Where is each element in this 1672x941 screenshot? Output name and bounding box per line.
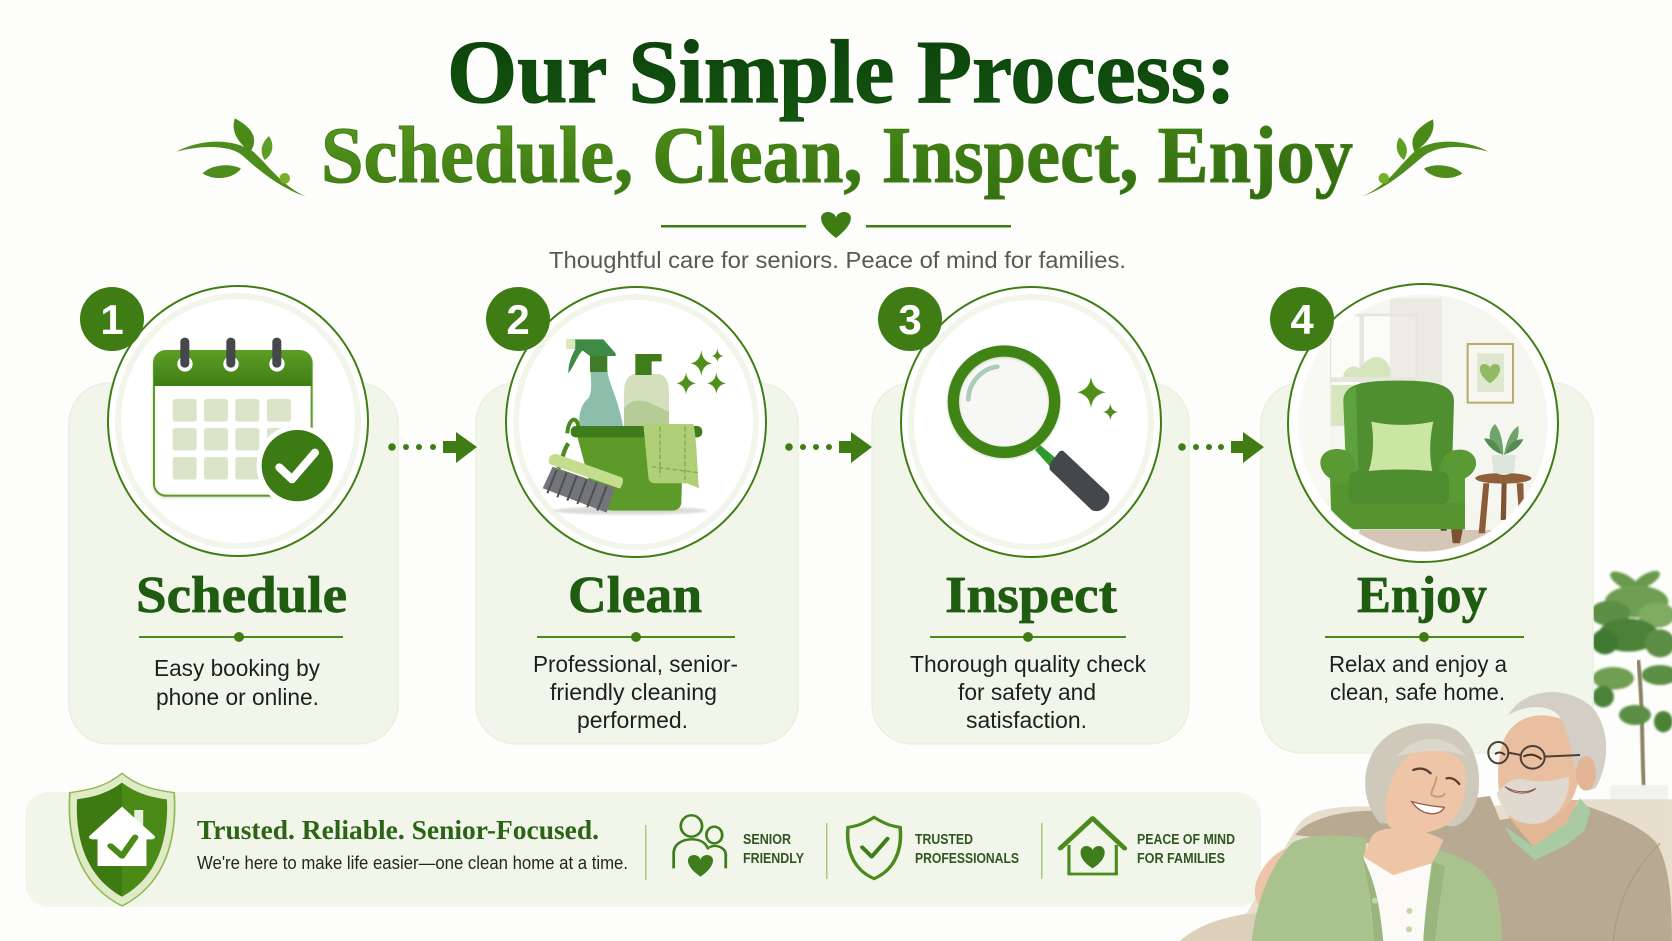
icon: left leaf ornament — [176, 118, 306, 197]
step 3 divider — [930, 632, 1126, 642]
band tagline: We're here to make life easier—one clean home at a time. — [197, 853, 628, 873]
feature: trusted professionals: PROFESSIONALS — [915, 851, 1019, 867]
step 3 number badge: 3 — [898, 296, 922, 343]
step 2 description: performed. — [577, 707, 688, 733]
step 1 description: Easy booking by — [154, 655, 320, 681]
card 1 panel — [69, 383, 398, 744]
arrow 1 to 2 — [388, 432, 477, 463]
senior couple on sofa — [1180, 692, 1672, 941]
step 3 description — [910, 651, 1146, 733]
step 2 number badge — [486, 287, 550, 351]
feature: senior friendly: FRIENDLY — [743, 851, 804, 867]
feature: trusted professionals: TRUSTED — [915, 832, 973, 848]
feature: peace of mind — [1137, 832, 1235, 867]
band headline: Trusted. Reliable. Senior-Focused. — [197, 815, 599, 845]
arrow 3 to 4 — [1178, 432, 1264, 463]
feature: senior friendly — [743, 832, 804, 867]
step 1 description — [154, 655, 320, 710]
feature icons — [674, 815, 1125, 879]
step 4 description: clean, safe home. — [1330, 679, 1505, 705]
step 4 number badge — [1270, 287, 1334, 351]
step 2 divider — [537, 632, 735, 642]
step 4 divider — [1325, 632, 1524, 642]
arrow 2 to 3 — [785, 432, 872, 463]
step 2 description: Professional, senior- — [533, 651, 738, 677]
feature: peace of mind: FOR FAMILIES — [1137, 851, 1225, 867]
step 3 description: satisfaction. — [966, 707, 1087, 733]
step 4 description — [1329, 651, 1507, 705]
step 4 circle and armchair room illustration — [1288, 284, 1558, 562]
icon: right leaf ornament — [1362, 119, 1489, 197]
step 2 number badge: 2 — [506, 296, 530, 343]
step 1 divider — [139, 632, 343, 642]
step 3 circle and magnifier icon — [901, 287, 1161, 557]
feature: trusted professionals — [915, 832, 1019, 867]
tagline: Thoughtful care for seniors. Peace of mind for families. — [549, 247, 1126, 273]
step 1 number badge — [80, 287, 144, 351]
step 4 heading: Enjoy — [1357, 567, 1487, 624]
feature: senior friendly: SENIOR — [743, 832, 791, 848]
step 3 heading: Inspect — [945, 567, 1118, 624]
step 1 heading: Schedule — [136, 567, 347, 624]
step 1 description: phone or online. — [156, 684, 319, 710]
title: Our Simple Process: — [447, 23, 1236, 122]
bottom trust band — [25, 792, 1261, 907]
feature: peace of mind: PEACE OF MIND — [1137, 832, 1235, 848]
step 1 number badge: 1 — [100, 296, 124, 343]
step 1 circle and calendar icon — [108, 286, 368, 556]
card 2 panel — [476, 383, 798, 744]
card 3 panel — [872, 383, 1189, 744]
step 4 description: Relax and enjoy a — [1329, 651, 1507, 677]
step 2 circle and cleaning supplies icon — [506, 287, 766, 557]
step 2 heading: Clean — [568, 567, 702, 624]
step 4 number badge: 4 — [1290, 296, 1314, 343]
step 2 description — [533, 651, 738, 733]
card 4 panel — [1261, 383, 1593, 753]
step 3 number badge — [878, 287, 942, 351]
step 3 description: for safety and — [958, 679, 1096, 705]
step 2 description: friendly cleaning — [550, 679, 717, 705]
icon: shield with house — [69, 773, 175, 906]
step 3 description: Thorough quality check — [910, 651, 1146, 677]
subtitle: steps: Schedule, Clean, Inspect, Enjoy — [321, 112, 1353, 200]
plant behind couple — [1590, 567, 1672, 800]
heart divider — [661, 212, 1011, 238]
